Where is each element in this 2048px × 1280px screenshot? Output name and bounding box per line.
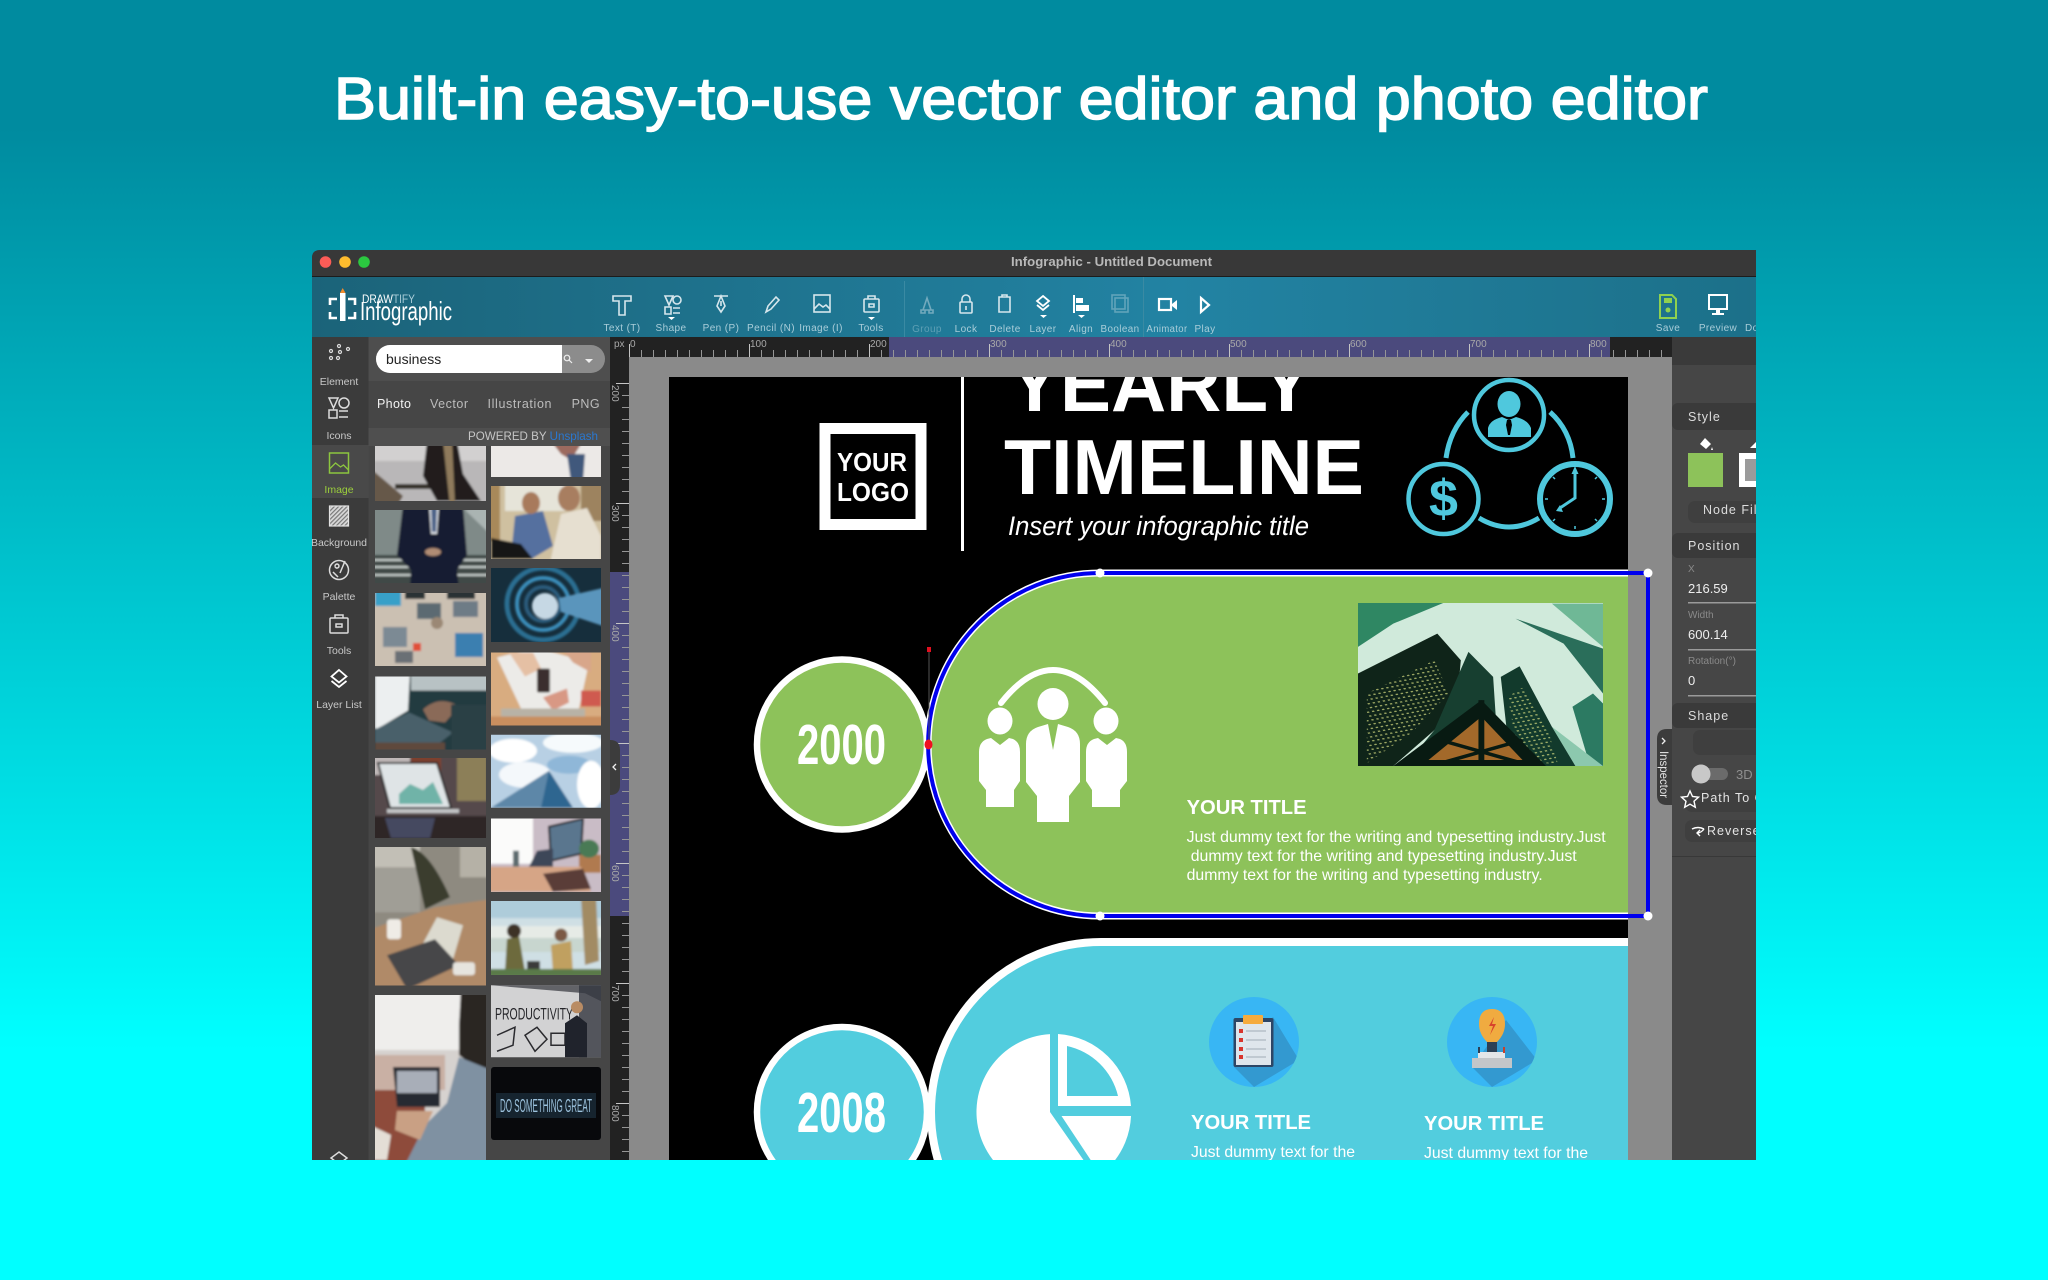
year badge 2008: 2008 — [797, 1081, 886, 1145]
year badge 2008 — [757, 1027, 927, 1197]
tool: pen — [703, 296, 739, 334]
photo: man using laptop — [375, 995, 486, 1160]
section: position: 0 — [1688, 673, 1695, 688]
year badge 2000 — [757, 660, 927, 830]
section: shape: Shape — [1688, 709, 1729, 723]
photo: clouds and glass pyramid — [491, 734, 601, 808]
tool: boolean: Boolean — [1100, 324, 1140, 335]
tool: text: Text (T) — [603, 323, 641, 334]
tool: pencil — [747, 297, 795, 334]
inspector tab — [1657, 729, 1672, 805]
category tabs — [378, 398, 599, 408]
top horizontal ruler: 300 — [990, 339, 1007, 350]
top horizontal ruler: 500 — [1230, 339, 1247, 350]
top horizontal ruler: 0 — [630, 339, 636, 350]
tool: layer: Layer — [1029, 324, 1057, 335]
sidebar item: element: Element — [320, 376, 358, 388]
panel collapse handle — [610, 740, 620, 795]
vertical ruler: 400 — [609, 625, 620, 642]
photo: person on bench — [375, 446, 486, 501]
powered by — [368, 428, 610, 446]
photo: tablet on wooden table — [375, 847, 486, 986]
section: position: X — [1688, 564, 1695, 575]
tool: save — [1656, 295, 1680, 334]
vertical ruler: 300 — [609, 505, 620, 522]
photo: do something great sign — [491, 1067, 601, 1140]
tool: delete — [989, 295, 1021, 335]
green card — [928, 573, 1640, 916]
tool: align: Align — [1069, 324, 1093, 335]
logo placeholder — [825, 428, 921, 524]
canvas workspace — [629, 357, 1672, 1160]
timeline row 2000 — [757, 573, 1640, 916]
tool: align — [1069, 295, 1093, 335]
tool: preview: Preview — [1699, 323, 1738, 334]
text: column two: YOUR TITLE — [1424, 1113, 1544, 1135]
sidebar item: palette — [323, 560, 355, 603]
photo: white surface — [491, 446, 601, 477]
photo thumbnails — [370, 441, 606, 1165]
tool: group — [912, 298, 942, 335]
tool: image: Image (I) — [799, 323, 843, 334]
headline: Built-in easy-to-use vector editor and photo editor — [334, 66, 1708, 132]
tool: document, cropped: Do — [1745, 323, 1759, 334]
top horizontal ruler: 400 — [1110, 339, 1127, 350]
top horizontal ruler — [610, 337, 1672, 357]
title bar: Infographic - Untitled Document — [1011, 254, 1213, 269]
sidebar item: background — [311, 506, 367, 549]
tool: lock — [955, 294, 977, 332]
tool: save: Save — [1656, 323, 1680, 334]
tool: play: Play — [1194, 324, 1216, 335]
section: position: Rotation(°) — [1688, 656, 1736, 667]
tool: shape — [656, 296, 686, 334]
inspector tab: Inspector — [1657, 751, 1671, 798]
timeline row 2008 — [757, 942, 1640, 1280]
section: position: 600.14 — [1688, 627, 1728, 642]
text: column two — [1424, 1113, 1588, 1162]
vertical ruler: 800 — [609, 1105, 620, 1122]
section: style: Node Filter — [1703, 503, 1775, 517]
image library panel — [368, 337, 610, 1165]
section: shape: 3D — [1736, 767, 1753, 782]
tool: boolean — [1100, 295, 1140, 335]
tool: animator — [1146, 299, 1188, 335]
sidebar item: background: Background — [311, 537, 367, 549]
photo: hands typing on laptop — [375, 676, 486, 750]
section: style: Style — [1688, 410, 1721, 424]
vertical ruler: 700 — [609, 985, 620, 1002]
top horizontal ruler: 800 — [1590, 339, 1607, 350]
app logo: DRAWTIFY — [362, 294, 415, 306]
tool: tools: Tools — [858, 323, 884, 334]
infographic subtitle: Insert your infographic title — [1008, 511, 1309, 541]
category tabs: PNG — [572, 397, 600, 411]
tool: pen: Pen (P) — [703, 323, 739, 334]
icon: idea bulb badge — [1447, 997, 1537, 1087]
app logo: Infographic — [360, 296, 452, 326]
icon: business team — [979, 670, 1127, 822]
tool: pencil: Pencil (N) — [747, 323, 795, 334]
icon: pie chart — [976, 1034, 1131, 1190]
sidebar item: element — [320, 344, 358, 388]
tool: delete: Delete — [989, 324, 1021, 335]
section: shape — [1672, 703, 1794, 857]
search bar — [376, 345, 605, 373]
category tabs: Illustration — [488, 397, 552, 411]
text: column two: Just dummy text for the — [1424, 1145, 1588, 1162]
sidebar item: layer list: Layer List — [316, 699, 362, 711]
tool: text — [603, 296, 641, 334]
app logo — [330, 288, 452, 326]
sidebar item: bottom icon, cropped — [330, 1151, 348, 1160]
sidebar item: tools: Tools — [327, 645, 351, 657]
vertical ruler — [609, 357, 629, 1160]
section: position: 216.59 — [1688, 581, 1728, 596]
section: position: Position — [1688, 539, 1740, 553]
photo: bright home office — [491, 818, 601, 892]
photo: spiral building — [491, 568, 601, 642]
photo: couple at beach cafe — [491, 901, 601, 975]
photo: desk with smartphone — [491, 652, 601, 726]
toolbar — [312, 277, 1759, 337]
top horizontal ruler: 100 — [750, 339, 767, 350]
year badge 2000: 2000 — [797, 713, 886, 777]
tool: lock: Lock — [955, 324, 978, 335]
text: description: Just dummy text for the writing and typesetting industry.Just — [1187, 829, 1606, 846]
tool: preview — [1699, 295, 1738, 334]
tool: shape: Shape — [656, 323, 686, 334]
tool: play — [1194, 298, 1216, 335]
icon: clipboard badge — [1209, 997, 1299, 1087]
section: style — [1672, 403, 1778, 523]
logo placeholder: YOUR — [837, 447, 907, 477]
title bar — [312, 250, 1756, 278]
section: shape: Reverse — [1707, 824, 1761, 838]
text: your title: YOUR TITLE — [1187, 797, 1307, 819]
logo placeholder: LOGO — [837, 477, 909, 507]
photo: productivity wall — [491, 985, 601, 1058]
photo: green skyscrapers — [1358, 603, 1603, 766]
sidebar item: image — [324, 453, 354, 496]
sidebar item: palette: Palette — [323, 591, 355, 603]
right inspector panel — [1672, 337, 1794, 1160]
photo: team desk from above — [375, 593, 486, 666]
photo: laptop with charts — [375, 758, 486, 838]
top horizontal ruler: 700 — [1470, 339, 1487, 350]
sidebar item: icons — [326, 398, 352, 442]
blue card — [931, 942, 1640, 1280]
icon: people, money, time cycle — [1408, 380, 1610, 534]
sidebar item: layer list — [316, 670, 362, 711]
powered by: POWERED BY Unsplash — [468, 429, 598, 443]
text: column one — [1191, 1112, 1355, 1161]
infographic title: TIMELINE — [1004, 423, 1364, 511]
selection outline and handles — [924, 568, 1652, 920]
top horizontal ruler: 200 — [870, 339, 887, 350]
photo: two men talking — [491, 486, 601, 559]
photo: man in suit on stairs — [375, 510, 486, 583]
text: description: dummy text for the writing and typesetting industry.Just — [1191, 848, 1577, 865]
search bar: business — [386, 351, 441, 367]
title divider — [961, 377, 964, 551]
sidebar item: icons: Icons — [326, 430, 352, 442]
tool: image — [799, 295, 843, 334]
left icon sidebar — [311, 337, 368, 1164]
infographic title: YEARLY — [1009, 340, 1312, 428]
infographic page — [669, 340, 1640, 1280]
category tabs: Vector — [430, 397, 468, 411]
tool: animator: Animator — [1146, 324, 1188, 335]
vertical ruler: 600 — [609, 865, 620, 882]
text: description: dummy text for the writing and typesetting industry. — [1187, 867, 1543, 884]
text: column one: YOUR TITLE — [1191, 1112, 1311, 1134]
icon: people, money, time cycle: $ — [1429, 470, 1458, 528]
app window screenshot — [312, 250, 1756, 1160]
tool: tools — [858, 296, 884, 334]
section: position — [1672, 533, 1762, 696]
category tabs: Photo — [377, 397, 411, 411]
infographic title — [1004, 340, 1364, 511]
vertical ruler: 200 — [609, 385, 620, 402]
tool: layer — [1029, 296, 1057, 335]
top horizontal ruler: px — [614, 339, 625, 350]
tool: group: Group — [912, 324, 942, 335]
top horizontal ruler: 600 — [1350, 339, 1367, 350]
text: column one: Just dummy text for the — [1191, 1144, 1355, 1161]
section: position: Width — [1688, 610, 1714, 621]
sidebar item: image: Image — [324, 484, 354, 496]
sidebar item: tools — [327, 615, 351, 657]
section: shape: Path To Group — [1701, 791, 1794, 805]
text: description — [1187, 829, 1606, 884]
